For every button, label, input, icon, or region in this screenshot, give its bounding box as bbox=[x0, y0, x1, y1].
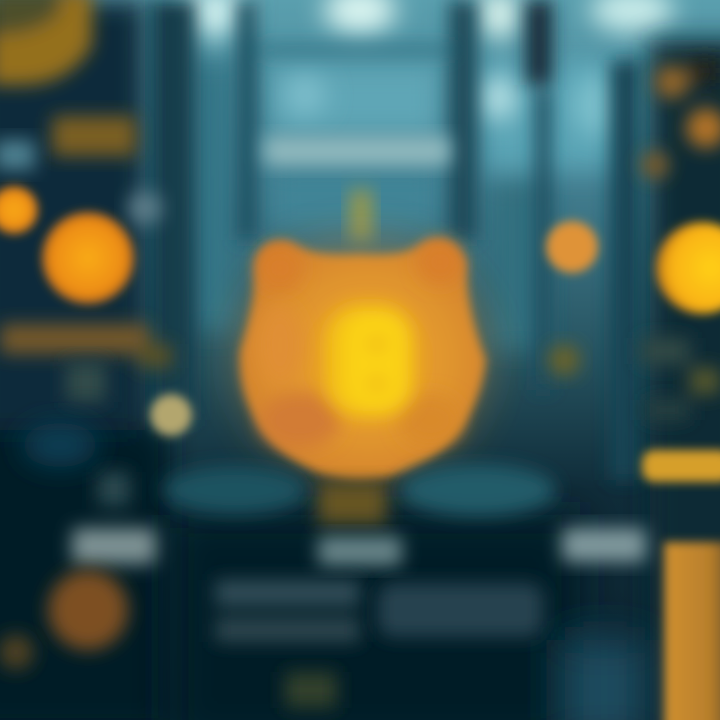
orb: pale small bbox=[150, 394, 192, 436]
left bowl bbox=[163, 466, 307, 514]
left column: gold heading bbox=[52, 116, 136, 156]
orb: right large bbox=[656, 222, 720, 314]
shield bbox=[240, 240, 486, 480]
grey label: right bbox=[562, 528, 646, 562]
shield ears bbox=[258, 240, 462, 290]
left column: small grey text bbox=[66, 362, 106, 402]
right bowl bbox=[400, 464, 556, 516]
left dark panel bbox=[0, 0, 170, 720]
right small dim marker bbox=[548, 344, 580, 376]
orb: lower left dim bbox=[48, 570, 128, 650]
orb: left large bbox=[42, 212, 134, 304]
orb: left edge bbox=[0, 186, 38, 234]
bitcoin symbol bbox=[326, 305, 414, 417]
shield body bbox=[240, 240, 486, 480]
shield lower mottling bbox=[258, 305, 462, 448]
right dark panel bbox=[650, 40, 720, 720]
left column: gold text band bbox=[0, 324, 172, 368]
dark vertical columns bbox=[150, 0, 640, 480]
right column: gold label bbox=[642, 450, 720, 482]
heading placeholder: pale title band bbox=[264, 136, 450, 166]
lower left text block bbox=[215, 580, 360, 642]
left column: pale label bbox=[0, 140, 35, 170]
grey label: left bbox=[72, 472, 156, 564]
left small pale icon bbox=[128, 191, 162, 225]
shield base stem bbox=[318, 482, 386, 524]
stem above shield bbox=[350, 190, 372, 240]
lower right text block bbox=[378, 583, 543, 637]
window light panes bbox=[190, 60, 630, 350]
top light spots bbox=[181, 0, 674, 137]
right column: small text marks bbox=[640, 338, 720, 420]
right column: gold vertical bar bbox=[664, 542, 720, 720]
right column: top orange icons bbox=[641, 58, 720, 179]
orb: right small bbox=[546, 221, 598, 273]
left column: gold corner block bbox=[0, 0, 92, 85]
grey label: center bbox=[318, 536, 402, 566]
orb: bottom left dim bbox=[0, 634, 34, 670]
lower dark floor bbox=[170, 515, 645, 720]
shield glow bbox=[234, 238, 490, 482]
bottom small gold marker bbox=[285, 672, 337, 708]
left dim blue mark bbox=[22, 423, 98, 467]
